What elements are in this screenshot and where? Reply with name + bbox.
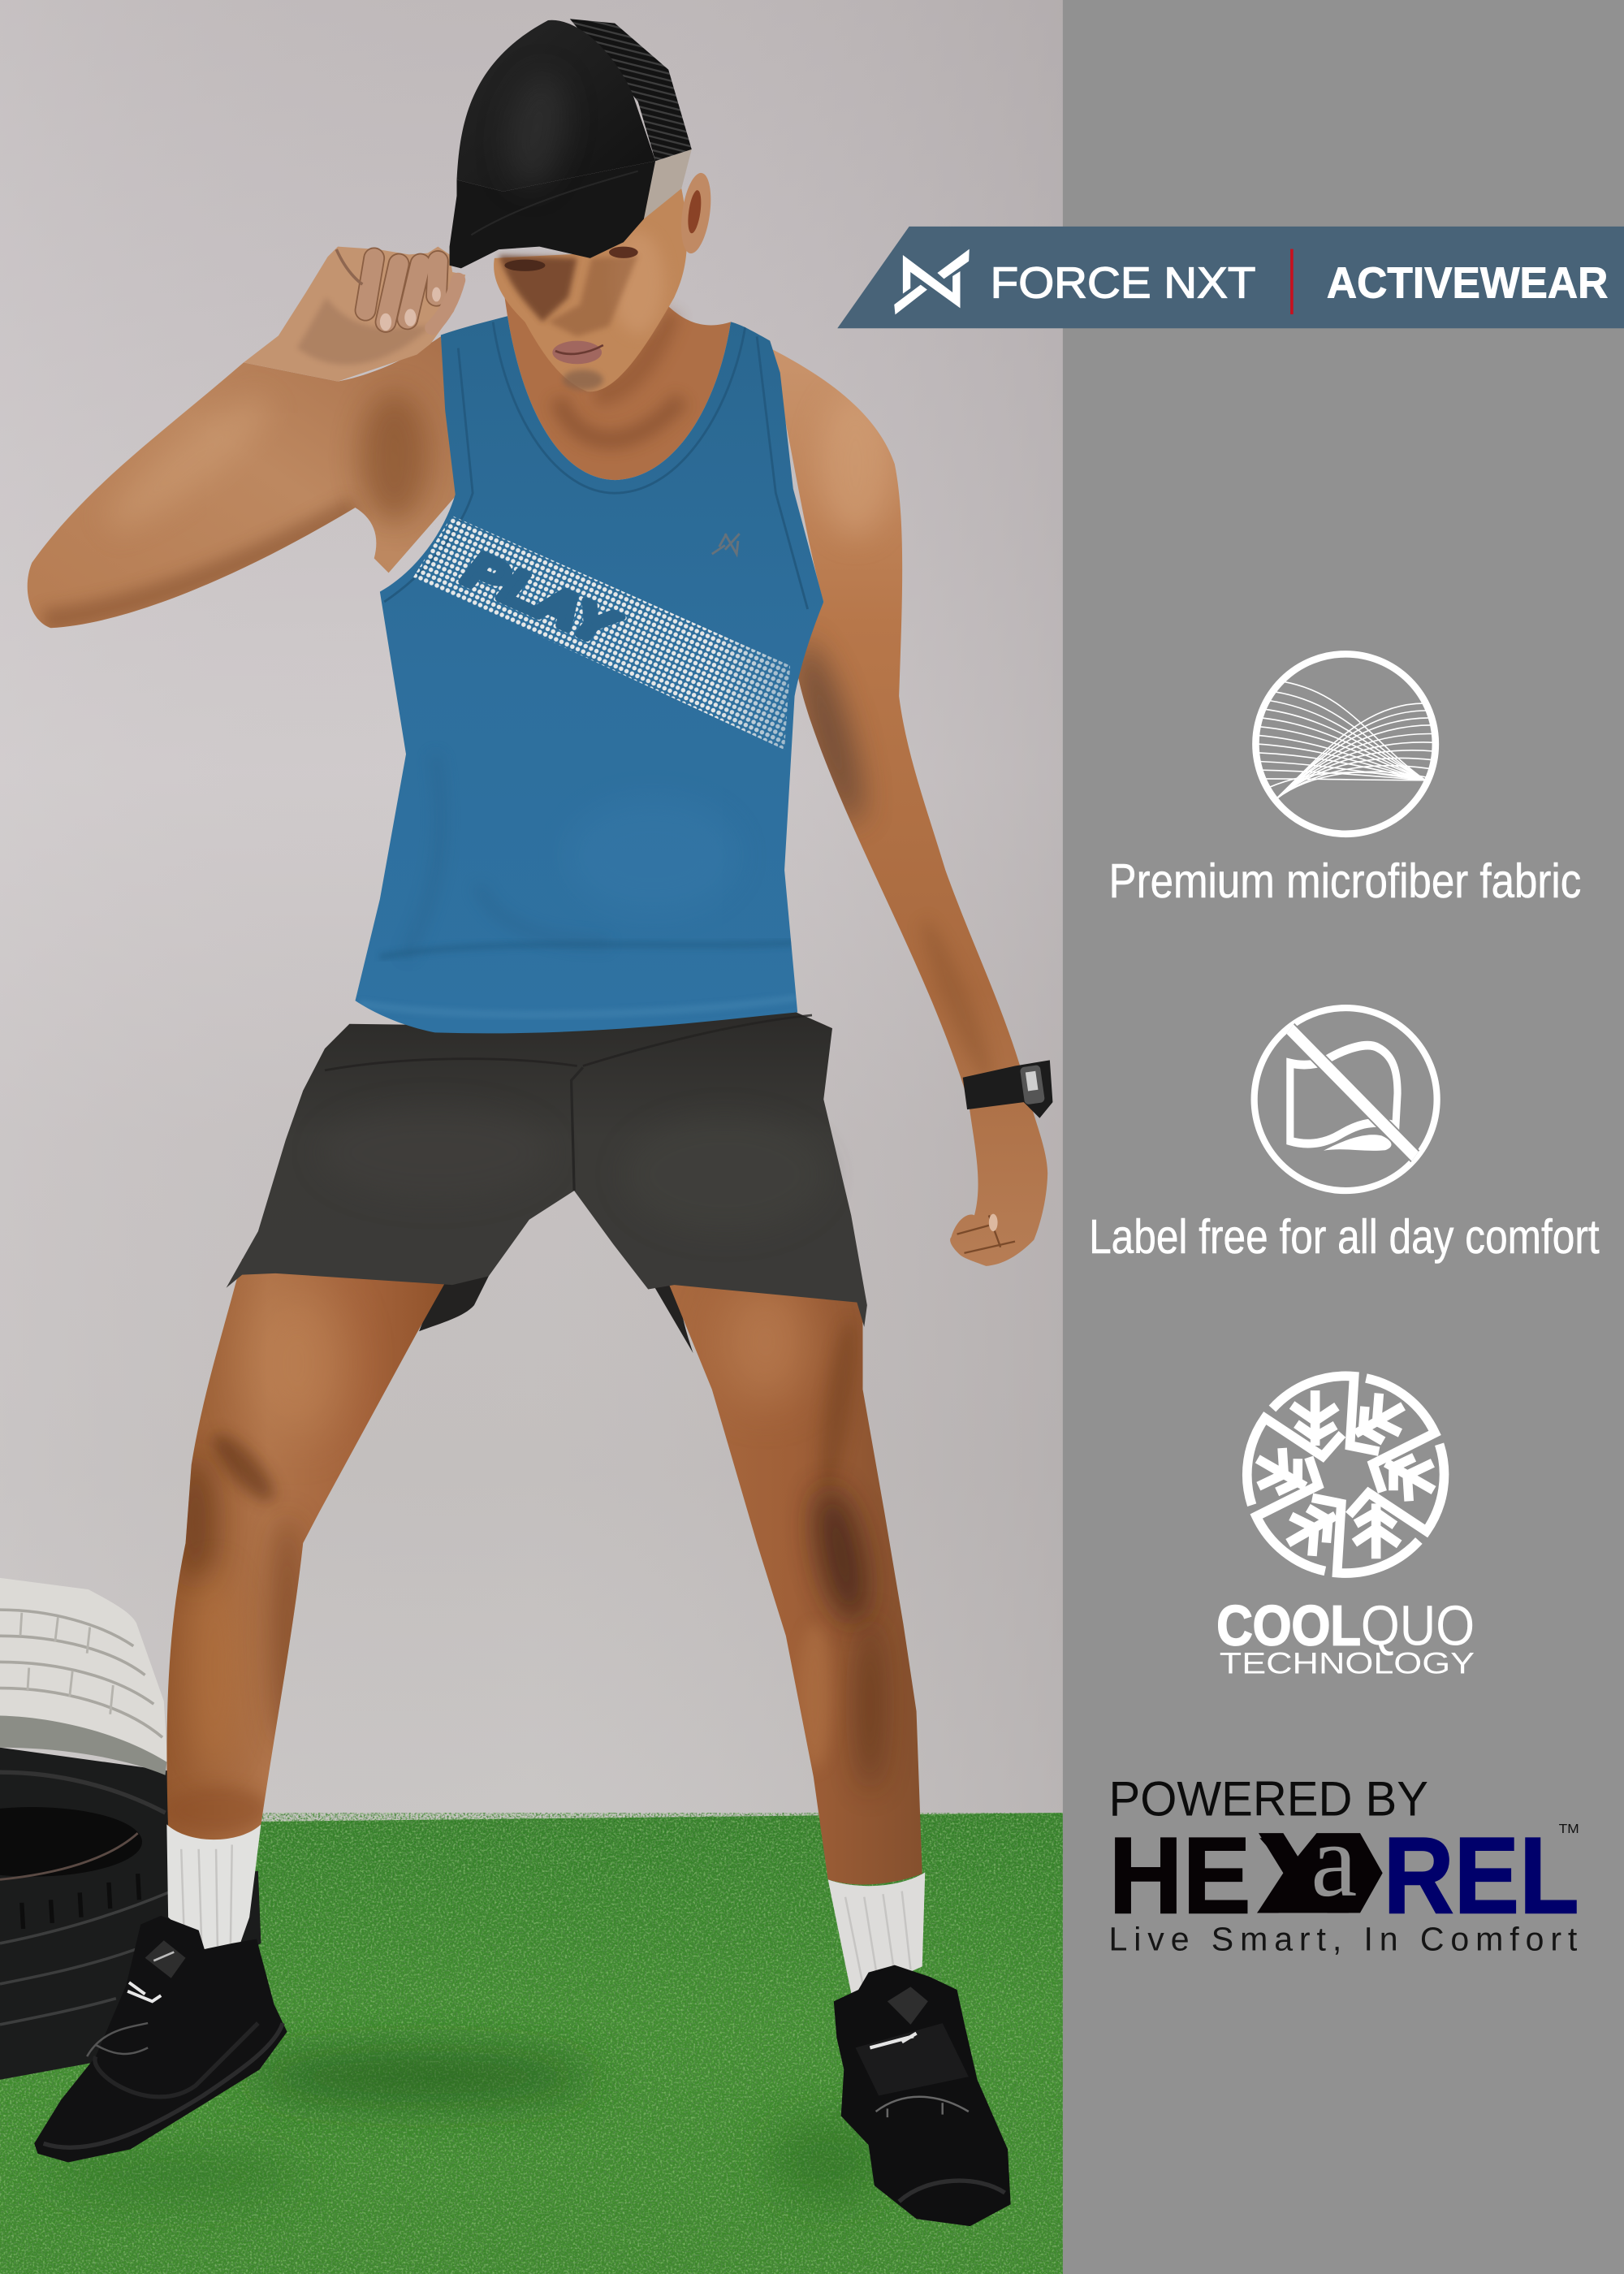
brand name: FORCE NXT [991,260,1255,308]
icon: snowflake in segmented ring [1224,1362,1467,1587]
Coolquo wordmark: COOLQUO [1216,1594,1475,1658]
model: ear [676,171,715,255]
tagline: Live Smart, In Comfort [1109,1920,1578,1957]
model: right shoe [834,1965,1011,2226]
model: left shoe [34,1916,287,2162]
stacked tyres: white tyre [0,1578,167,1775]
powered by Hexarel [1109,1772,1579,1957]
icon: crossed-out label [1255,1008,1437,1191]
chest and neck shading [559,312,681,440]
feature: label free [1089,1008,1600,1264]
model: right leg [659,1262,922,1885]
model: left leg [166,1259,456,1840]
category name: ACTIVEWEAR [1327,260,1608,308]
model: neck and chest [505,298,731,480]
red divider [1290,249,1294,314]
Technology wordmark: TECHNOLOGY [1220,1646,1475,1680]
powered by line: POWERED BY [1109,1772,1428,1827]
model: left arm and shoulder [28,336,458,628]
icon: woven fabric waves in circle [1255,654,1436,834]
feature: premium microfiber fabric [1109,654,1581,908]
stacked tyres: black tyre [0,1748,261,2080]
Hexarel wordmark: a [1311,1802,1357,1918]
model: hand gripping cap brim [244,247,465,382]
feature: Coolquo technology [1216,1362,1475,1680]
Hexarel wordmark: TM [1559,1822,1579,1836]
Hexarel wordmark: X [1255,1815,1350,1936]
model: right arm and hand [770,348,1047,1266]
studio wall backdrop [0,0,1063,1839]
Hexarel wordmark: REL [1384,1815,1579,1936]
Hexarel wordmark: HE [1109,1815,1251,1936]
header ribbon [837,227,1624,328]
model: wristwatch [963,1060,1052,1118]
icon: Force NXT logo [894,249,970,314]
artificial turf floor [0,1813,1063,2274]
chest logo [712,534,740,554]
grey side panel [1063,0,1624,2274]
model: face [494,149,692,391]
model: socks [166,1824,925,2007]
halftone diagonal stripe [413,516,790,750]
model: shorts [227,1012,867,1327]
model: trucker cap [450,19,692,268]
model: rear short panels [419,1276,693,1353]
model: tank top [356,316,823,1033]
PLAY chest print: PLAY [457,541,627,658]
Hexarel wordmark [1109,1802,1579,1936]
photo: model on wall and turf background [0,0,1063,2274]
